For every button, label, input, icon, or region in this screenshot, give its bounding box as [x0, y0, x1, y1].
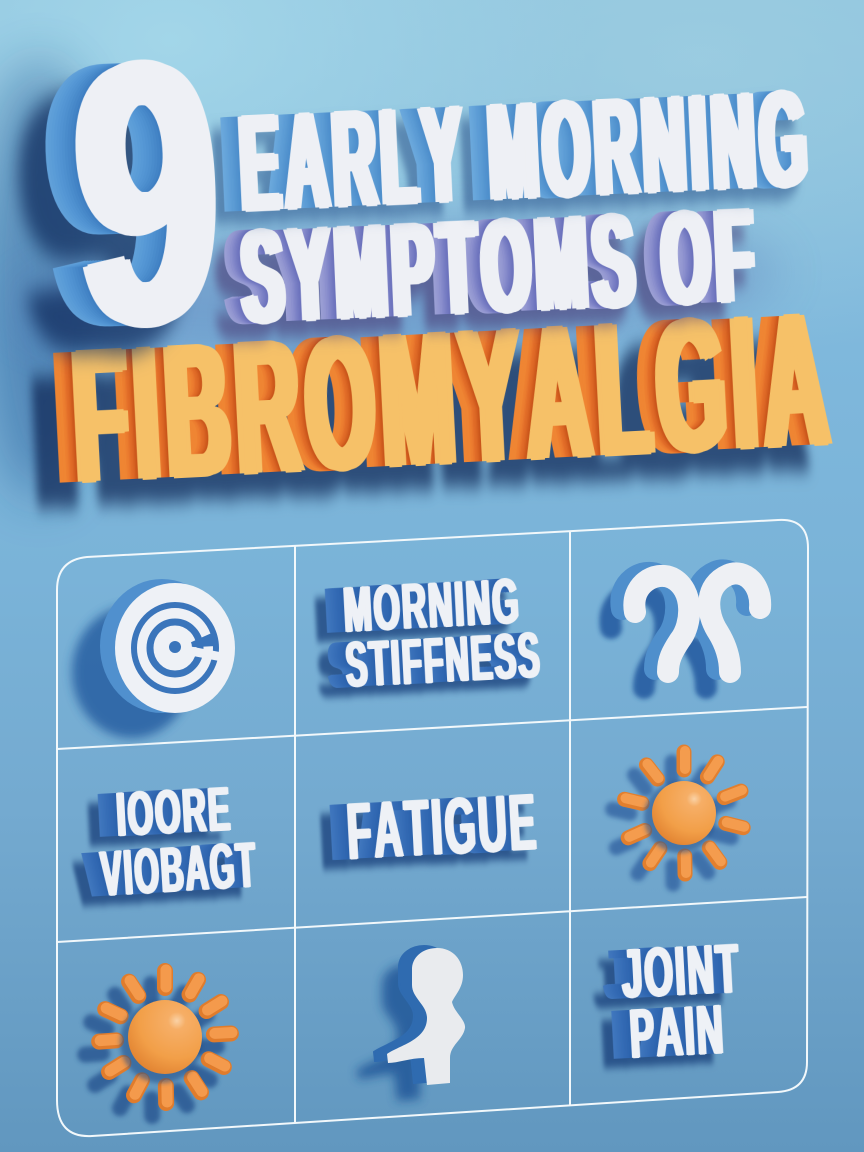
icon: sun small: [613, 751, 744, 884]
icon: head silhouette: [357, 946, 465, 1101]
label: joint pain: [592, 929, 742, 1073]
label: ioore viobagt: IOORE: [115, 775, 234, 850]
title: [10, 0, 839, 523]
label: fatigue: FATIGUE: [345, 777, 540, 876]
label: ioore viobagt: [71, 775, 259, 910]
label: joint pain: PAIN: [628, 990, 727, 1073]
label: joint pain: JOINT: [620, 929, 742, 1013]
label: morning stiffness: STIFFNESS: [344, 619, 543, 701]
title: FIBROMYALGIA in orange: FIBROMYALGIA: [68, 274, 839, 523]
label: morning stiffness: [312, 565, 543, 702]
title: EARLY MORNING: EARLY MORNING: [237, 62, 815, 241]
icon: double hooks: [610, 570, 760, 688]
label: morning stiffness: MORNING: [342, 565, 522, 646]
title: SYMPTOMS OF: SYMPTOMS OF: [239, 181, 762, 352]
panel: symptom grid: [56, 518, 809, 1138]
icon: target: [72, 579, 235, 738]
label: ioore viobagt: VIOBAGT: [99, 828, 259, 910]
icon: sun large: [85, 970, 232, 1116]
